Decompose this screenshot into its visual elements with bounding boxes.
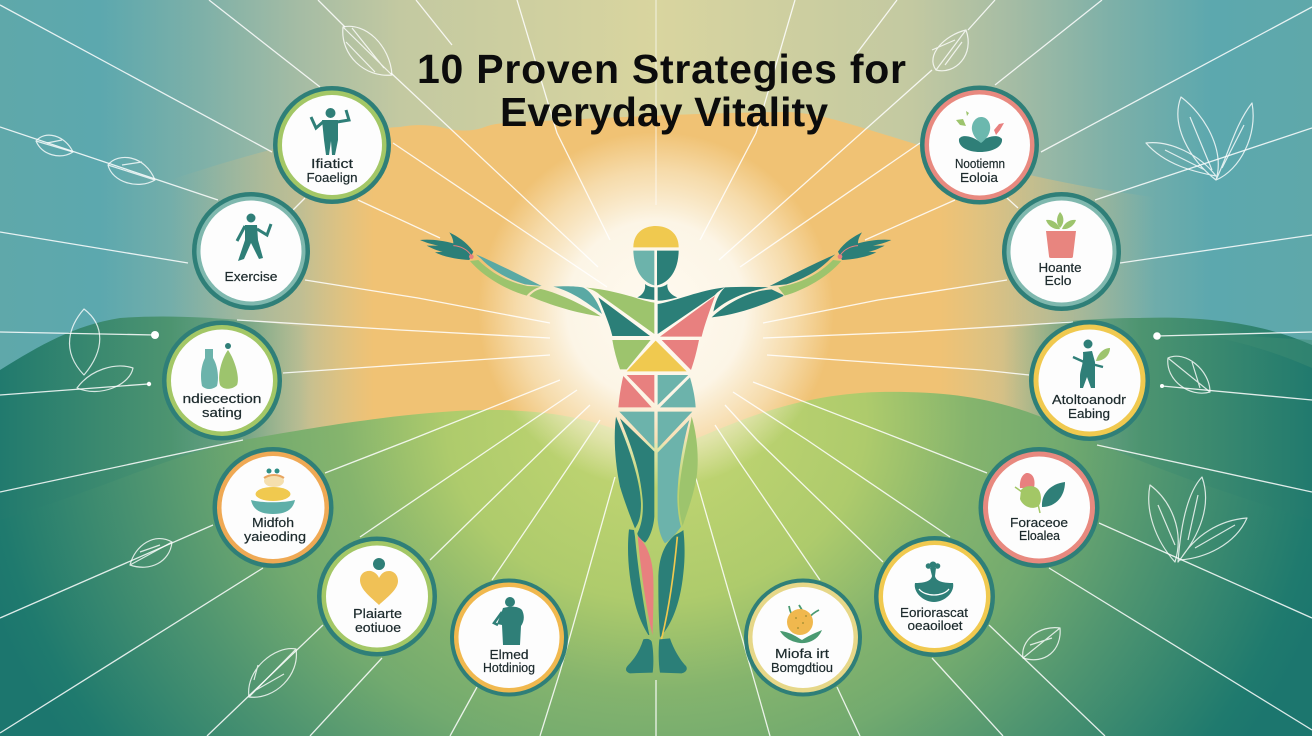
title: Everyday Vitality bbox=[500, 89, 828, 135]
right arm bbox=[712, 232, 891, 317]
badge: bottom centre left: Elmed bbox=[490, 648, 529, 662]
badge: top left: Ifiatict bbox=[311, 157, 354, 171]
badge: right middle: Atoltoanodr bbox=[1052, 393, 1126, 407]
icon: two bottles bbox=[201, 343, 238, 389]
icon: citrus fruit on leaves bbox=[780, 605, 822, 643]
badge: top right bbox=[920, 86, 1039, 204]
badge: bottom centre right bbox=[744, 578, 862, 696]
badge: exercise bbox=[192, 192, 310, 310]
badge: left middle: sating bbox=[202, 406, 242, 420]
badge: top right: Eoloia bbox=[960, 171, 998, 185]
icon: walking person bbox=[237, 214, 271, 261]
badge: left middle bbox=[162, 320, 282, 440]
badge: lower left: yaieoding bbox=[244, 530, 306, 544]
icon: person holding leaf bbox=[1073, 340, 1110, 388]
badge: lower right: Eloalea bbox=[1019, 529, 1060, 543]
title: 10 Proven Strategies for bbox=[417, 46, 906, 92]
icon: meditation figure bbox=[915, 562, 953, 602]
background: right back hill bbox=[1002, 318, 1312, 736]
icon: heart with head bbox=[360, 558, 398, 605]
icon: stacked bowl bbox=[251, 468, 295, 514]
icon: person with raised arms bbox=[311, 108, 349, 155]
icon: standing person bbox=[494, 597, 524, 645]
badge: lower left bbox=[212, 447, 334, 568]
badge: lower right bbox=[978, 447, 1100, 568]
badge: bottom left: eotiuoe bbox=[355, 621, 401, 635]
central glow bbox=[478, 132, 834, 488]
lower body bbox=[615, 412, 698, 673]
badge: bottom right: oeaoiloet bbox=[908, 619, 963, 633]
badge: lower right: Foraceoe bbox=[1010, 516, 1068, 530]
badge: potted plant: Hoante bbox=[1038, 261, 1082, 275]
upper body bbox=[420, 226, 891, 407]
left arm bbox=[420, 232, 602, 316]
badge: potted plant: Eclo bbox=[1044, 274, 1072, 288]
central human figure bbox=[420, 226, 891, 673]
badge: exercise: Exercise bbox=[224, 270, 278, 284]
badge: bottom right: Eoriorascat bbox=[900, 606, 969, 620]
badge: bottom right bbox=[874, 536, 995, 657]
badge: lower left: Midfoh bbox=[252, 516, 294, 530]
badge: bottom centre left bbox=[450, 578, 568, 696]
badge: left middle: ndiecection bbox=[182, 392, 262, 406]
badge: bottom centre left: Hotdiniog bbox=[483, 661, 535, 675]
badge: top right: Nootiemn bbox=[955, 157, 1005, 171]
badge: bottom left: Plaiarte bbox=[353, 607, 402, 621]
badge: bottom centre right: Bomgdtiou bbox=[771, 661, 833, 675]
badge: bottom left bbox=[317, 536, 437, 656]
badge: potted plant bbox=[1002, 192, 1121, 311]
badge: right middle: Eabing bbox=[1068, 407, 1110, 421]
badge: top left: Foaelign bbox=[306, 171, 358, 185]
ray end dots bbox=[147, 331, 1164, 388]
title bbox=[417, 46, 906, 135]
background: orange sun field bbox=[170, 112, 1180, 470]
background: right hill shadow bbox=[1180, 332, 1312, 368]
icon: potted plant bbox=[1046, 212, 1076, 258]
badge: bottom centre right: Miofa irt bbox=[775, 647, 830, 661]
background: front green hill bbox=[0, 392, 1312, 736]
icon: fruit and leaf bbox=[1015, 473, 1065, 513]
badge: right middle bbox=[1029, 320, 1150, 441]
background: left back hill bbox=[0, 316, 310, 736]
badge: top left bbox=[273, 86, 391, 204]
icon: lotus with sprouts bbox=[956, 111, 1004, 152]
